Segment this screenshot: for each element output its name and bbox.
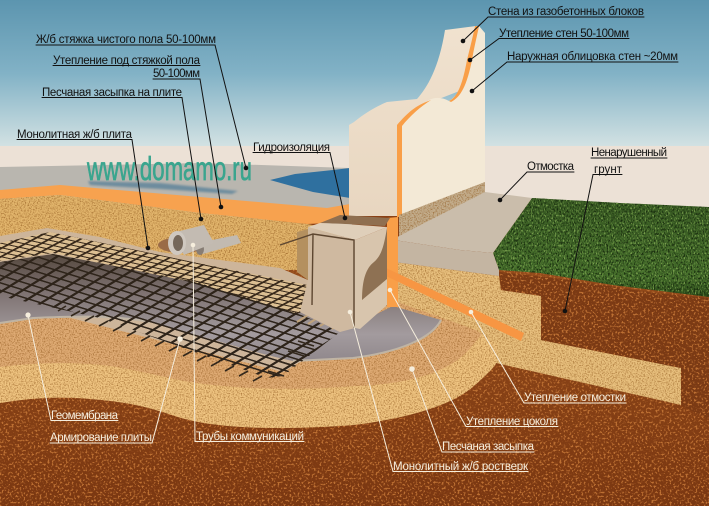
mesh overhanging bars xyxy=(58,306,314,381)
label: floor insulation xyxy=(53,55,223,209)
label: slab xyxy=(17,129,150,250)
panel: house wall xyxy=(349,26,485,236)
panel: white callouts xyxy=(25,243,626,473)
label: wall xyxy=(461,6,644,43)
label: wall insulation xyxy=(468,28,629,62)
shaded sand pocket xyxy=(297,229,308,280)
label: screed: Ж/б стяжка чистого пола 50-100мм xyxy=(36,34,216,46)
background: pale horizon xyxy=(0,146,709,210)
upper mesh xyxy=(0,232,307,314)
aerated concrete block wall xyxy=(349,26,476,216)
panel: blind area paving xyxy=(394,192,532,276)
large pipe rim xyxy=(168,231,186,255)
panel: outer sand fill xyxy=(392,262,681,405)
pipe base xyxy=(158,237,206,253)
watermark: site address xyxy=(86,150,252,194)
panel: soil xyxy=(0,270,709,506)
label: wall: Стена из газобетонных блоков xyxy=(488,6,644,18)
pool of blue reflection xyxy=(270,168,350,198)
watermark shadow xyxy=(88,181,238,194)
panel: reinforcement mesh xyxy=(0,225,350,381)
panel: undisturbed ground xyxy=(499,272,709,420)
label: blind area xyxy=(498,161,575,202)
footing front xyxy=(300,227,355,332)
label: reinforcement xyxy=(50,336,183,444)
label: screed xyxy=(36,34,248,170)
lower mesh xyxy=(0,250,345,380)
label: pipes: Трубы коммуникаций xyxy=(196,431,304,443)
label: pipes xyxy=(191,243,304,443)
label: plinth insulation: Утепление цоколя xyxy=(466,416,558,428)
panel: plinth and blind area insulation xyxy=(386,217,524,341)
label: undisturbed ground: Ненарушенный xyxy=(591,147,667,159)
footing right face xyxy=(355,227,387,329)
small pipe opening xyxy=(196,243,204,255)
floor insulation band xyxy=(0,185,350,224)
panel: compacted sand under membrane xyxy=(0,290,494,389)
waterproofing xyxy=(320,215,390,226)
label: undisturbed ground xyxy=(563,147,667,313)
label: floor insulation: 50-100мм xyxy=(153,68,200,80)
label: sand on slab: Песчаная засыпка на плите xyxy=(42,87,182,99)
label: reinforcement: Армирование плиты xyxy=(50,432,152,444)
panel: light sand backfill xyxy=(0,300,510,428)
panel: communication pipes xyxy=(158,225,241,255)
background: sky xyxy=(0,0,709,147)
rebar stirrup xyxy=(280,234,354,328)
label: floor insulation: Утепление под стяжкой пола xyxy=(53,55,201,67)
membrane edge highlight xyxy=(0,317,441,361)
wall insulation xyxy=(397,26,479,217)
grey floor screed xyxy=(0,163,352,225)
paving front xyxy=(394,240,499,276)
label: waterproofing xyxy=(253,142,347,220)
label: sand backfill: Песчаная засыпка xyxy=(442,441,535,453)
panel: grass xyxy=(493,198,709,297)
label: slab: Монолитная ж/б плита xyxy=(17,129,133,141)
label: wall insulation: Утепление стен 50-100мм xyxy=(499,28,629,40)
label: strip footing: Монолитный ж/б ростверк xyxy=(393,461,529,473)
blind area insulation xyxy=(386,268,524,341)
plinth insulation xyxy=(387,217,398,307)
label: cladding xyxy=(470,51,678,93)
small pipes xyxy=(197,235,241,254)
paving top xyxy=(394,192,532,253)
panel: geomembrane xyxy=(0,254,441,361)
sand backfill on slab xyxy=(0,195,340,300)
large pipe body xyxy=(172,225,214,255)
panel: monolithic slab xyxy=(0,228,356,372)
label: cladding: Наружная облицовка стен ~20мм xyxy=(507,51,678,63)
label: plinth insulation xyxy=(388,288,558,428)
label: waterproofing: Гидроизоляция xyxy=(253,142,330,154)
label: sand on slab xyxy=(42,87,203,221)
panel: strip footing xyxy=(280,215,390,332)
label: blind area: Отмостка xyxy=(527,161,575,173)
label: sand backfill xyxy=(409,366,535,453)
footing top xyxy=(308,223,387,240)
label: geomembrane: Геомембрана xyxy=(51,410,119,422)
outer cladding xyxy=(402,26,485,217)
upper mesh background xyxy=(0,232,347,314)
large pipe opening xyxy=(173,235,183,251)
panel: interior floor level xyxy=(0,163,352,300)
label: blind area insulation xyxy=(469,310,626,404)
label: undisturbed ground: грунт xyxy=(594,164,623,176)
tan bar ends near footing xyxy=(297,313,346,329)
watermark text: www.domamo.ru xyxy=(86,150,252,187)
label: strip footing xyxy=(348,310,529,473)
stone plinth cladding xyxy=(399,182,485,236)
label: blind area insulation: Утепление отмостки xyxy=(524,392,626,404)
footing cut-out xyxy=(362,228,387,300)
panel: black callouts xyxy=(17,6,678,313)
label: geomembrane xyxy=(25,312,119,422)
